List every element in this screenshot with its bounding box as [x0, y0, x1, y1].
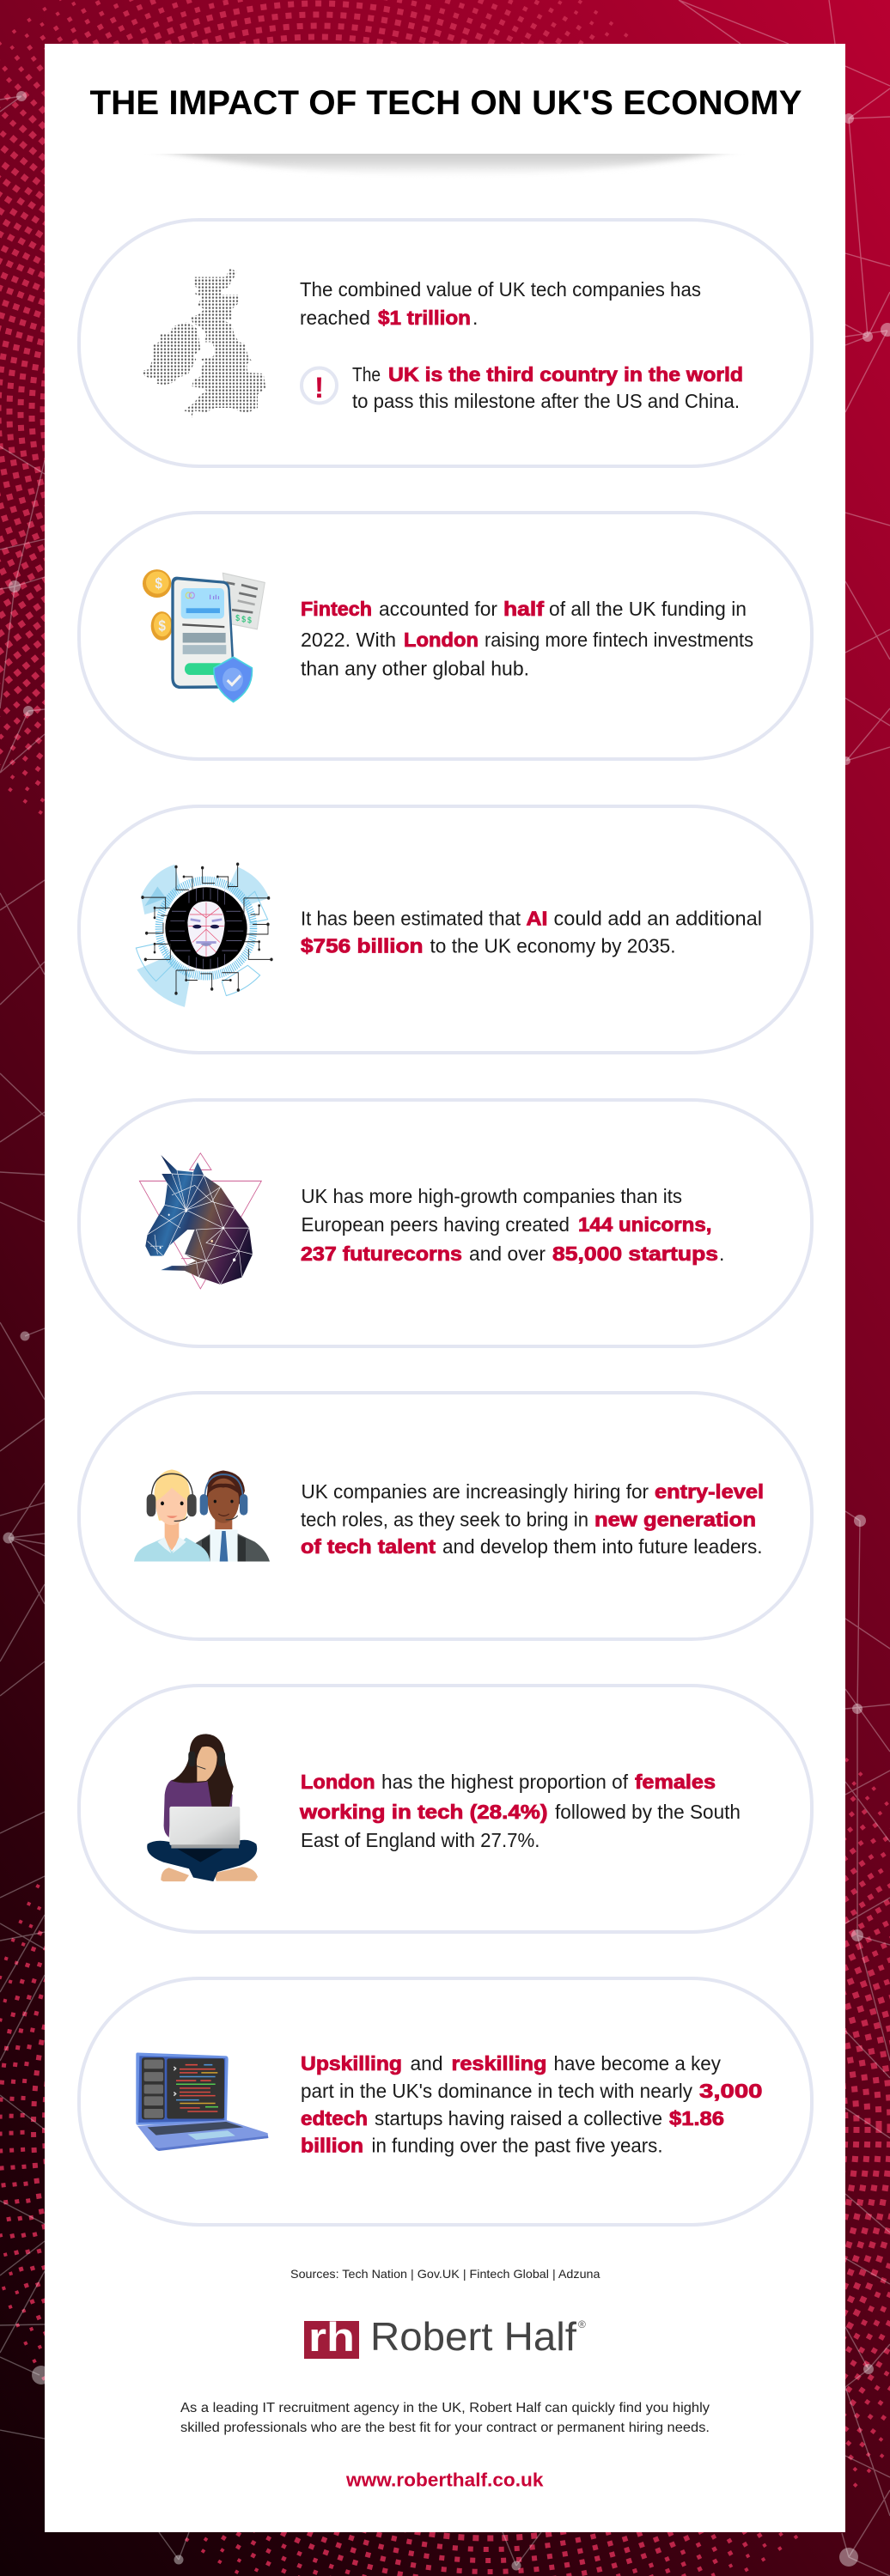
- text: unicorns: 85,000 startups: [552, 1242, 718, 1265]
- icon: fintech phone with coins and shield: $: [241, 615, 247, 624]
- icon: dotted UK map: [143, 269, 265, 418]
- text: entry-level hiring: UK companies are increasingly hiring for: [301, 1480, 649, 1503]
- text: entry-level hiring: entry-level: [655, 1480, 764, 1503]
- text: company description: skilled professionals who are the best fit for your contract or permanent hiring needs.: [180, 2421, 710, 2435]
- text: AI: to the UK economy by 2035.: [430, 934, 675, 957]
- text: combined value: The combined value of UK tech companies has: [300, 278, 701, 301]
- text: unicorns: European peers having created: [301, 1213, 570, 1236]
- icon: exclamation badge: [302, 368, 337, 404]
- panel: card 7, upskilling: [79, 1978, 812, 2225]
- icon: AI face with circuits: [136, 863, 273, 1007]
- text: AI: AI: [526, 907, 548, 929]
- text: upskilling: 3,000: [699, 2080, 763, 2102]
- text: AI: [301, 907, 762, 957]
- text: fintech: [301, 598, 753, 680]
- logo: Robert Half: Robert Half: [370, 2314, 576, 2359]
- icon: fintech phone with coins and shield: $: [155, 575, 162, 592]
- text: AI: It has been estimated that: [301, 907, 521, 929]
- text: fintech: than any other global hub.: [301, 658, 529, 680]
- text: entry-level hiring: new generation: [594, 1508, 756, 1530]
- text: unicorns: and over: [469, 1242, 546, 1265]
- text: upskilling: reskilling: [452, 2052, 546, 2075]
- text: unicorns: UK has more high-growth companies than its: [301, 1185, 682, 1207]
- icon: woman with laptop: [147, 1734, 258, 1881]
- text: women in tech: has the highest proportion of: [381, 1771, 629, 1793]
- icon: fintech phone with coins and shield: $: [235, 614, 241, 623]
- panel: card 6, women in tech: [79, 1686, 812, 1932]
- logo: Robert Half: [304, 2314, 586, 2360]
- website link: www.roberthalf.co.uk: [345, 2470, 544, 2490]
- text: company description: [180, 2401, 710, 2435]
- text: women in tech: London: [301, 1771, 375, 1793]
- icon: two people with headsets: [134, 1469, 270, 1562]
- panel: card 2, fintech: [79, 513, 812, 759]
- panel: card 4, unicorns: [79, 1100, 812, 1346]
- text: unicorns: [301, 1185, 724, 1265]
- sources line: Sources: Tech Nation | Gov.UK | Fintech Global | Adzuna: [290, 2267, 600, 2281]
- text: fintech: Fintech: [301, 598, 372, 620]
- icon: fintech phone with coins and shield: $: [247, 616, 253, 625]
- text: fintech: accounted for: [379, 598, 497, 620]
- panel: card 5, entry-level hiring: [79, 1393, 812, 1639]
- text: combined value: .: [472, 307, 478, 329]
- text: women in tech: East of England with 27.7%.: [301, 1829, 539, 1851]
- text: fintech: raising more fintech investments: [485, 629, 753, 651]
- text: AI: $756 billion: [301, 934, 423, 957]
- text: upskilling: billion: [301, 2135, 363, 2157]
- text: women in tech: females: [635, 1771, 716, 1793]
- icon: fintech phone with coins and shield: [143, 569, 265, 702]
- text: upskilling: edtech: [301, 2107, 368, 2129]
- text: entry-level hiring: of tech talent: [301, 1535, 436, 1558]
- text: upskilling: in funding over the past five years.: [371, 2135, 663, 2157]
- text: upskilling: and: [411, 2052, 443, 2075]
- icon: laptop with code: [136, 2053, 268, 2151]
- callout: third country: UK is the third country in the world: [388, 363, 743, 386]
- text: AI: could add an additional: [553, 907, 762, 929]
- text: combined value: $1 trillion: [378, 307, 471, 329]
- callout: third country: [352, 363, 743, 412]
- panel: card 3, AI: [79, 806, 812, 1053]
- text: unicorns: 237 futurecorns: [301, 1242, 462, 1265]
- text: upskilling: have become a key: [553, 2052, 721, 2075]
- text: women in tech: [299, 1771, 741, 1851]
- text: fintech: of all the UK funding in: [549, 598, 747, 620]
- text: women in tech: followed by the South: [555, 1801, 741, 1823]
- text: upskilling: startups having raised a collective: [375, 2107, 662, 2129]
- text: women in tech: working in tech (28.4%): [299, 1801, 548, 1823]
- icon: exclamation badge: !: [314, 372, 324, 404]
- text: fintech: half: [503, 598, 544, 620]
- icon: galaxy unicorn: [139, 1153, 261, 1289]
- text: fintech: London: [404, 629, 479, 651]
- text: upskilling: $1.86: [669, 2107, 724, 2129]
- text: upskilling: [301, 2052, 763, 2157]
- logo: Robert Half: ®: [578, 2318, 586, 2330]
- text: fintech: 2022. With: [301, 629, 396, 651]
- icon: fintech phone with coins and shield: $: [158, 618, 166, 635]
- text: upskilling: part in the UK's dominance in tech with nearly: [301, 2080, 692, 2102]
- callout: third country: to pass this milestone after the US and China.: [352, 390, 740, 412]
- text: entry-level hiring: tech roles, as they seek to bring in: [301, 1508, 588, 1530]
- text: company description: As a leading IT recruitment agency in the UK, Robert Half can quickly find you highly: [180, 2401, 710, 2415]
- text: unicorns: 144 unicorns,: [578, 1213, 711, 1236]
- logo: Robert Half: rh: [308, 2314, 355, 2360]
- title shadow divider: [162, 154, 728, 173]
- text: unicorns: .: [719, 1242, 724, 1265]
- text: combined value: [300, 278, 701, 329]
- title: THE IMPACT OF TECH ON UK'S ECONOMY: [89, 84, 802, 122]
- callout: third country: The: [352, 363, 381, 386]
- text: upskilling: Upskilling: [301, 2052, 402, 2075]
- panel: card 1, UK value: [79, 220, 812, 466]
- text: entry-level hiring: and develop them into future leaders.: [442, 1535, 763, 1558]
- text: entry-level hiring: [301, 1480, 764, 1558]
- text: combined value: reached: [300, 307, 370, 329]
